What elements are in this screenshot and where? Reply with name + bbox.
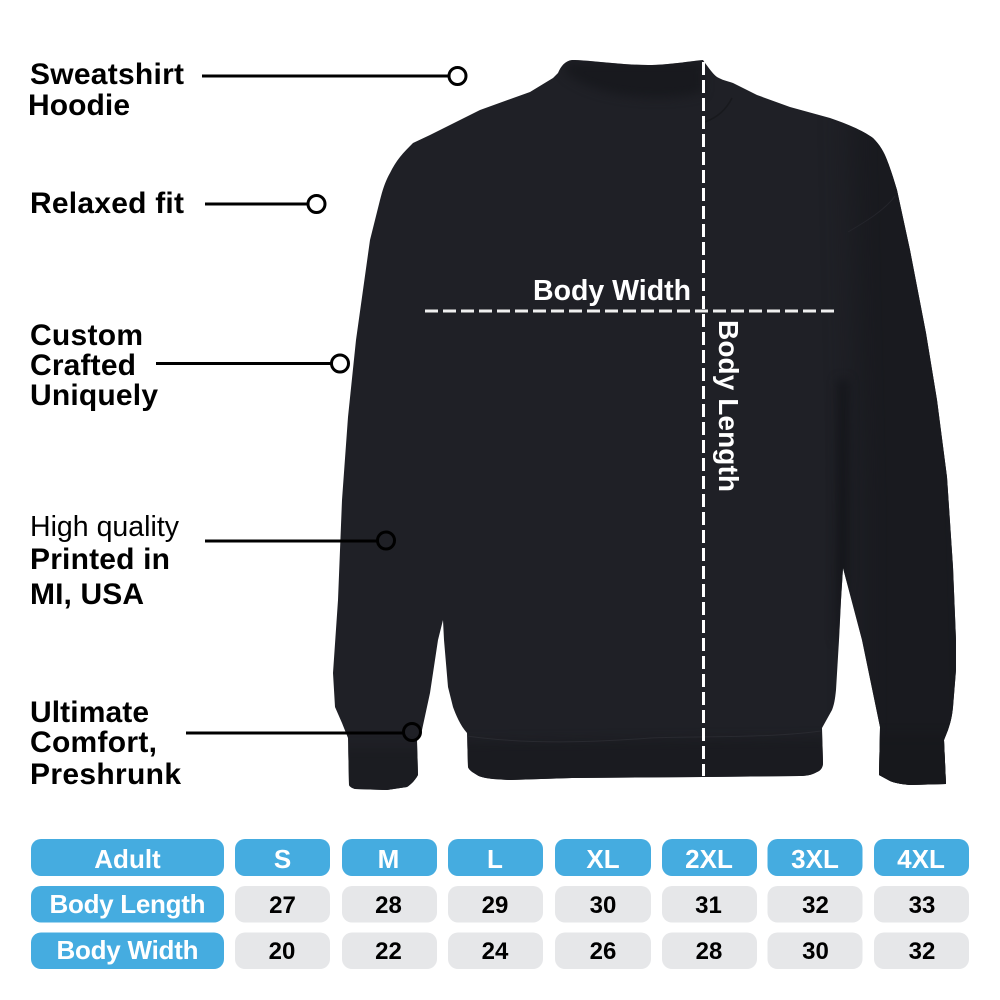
size table bbox=[31, 839, 969, 969]
body length row: 27 bbox=[269, 892, 296, 919]
neck opening shadow bbox=[560, 60, 707, 88]
body width row: 32 bbox=[909, 938, 935, 965]
callout: sweatshirt hoodie: Sweatshirt bbox=[30, 58, 184, 91]
callout: high quality printed in MI, USA: MI, USA bbox=[30, 578, 144, 611]
armpit shadow bbox=[839, 419, 850, 638]
body length row: 32 bbox=[802, 892, 829, 919]
body length row: Body Length bbox=[50, 889, 206, 919]
callout: custom crafted uniquely: Crafted bbox=[30, 349, 136, 382]
body length row bbox=[31, 886, 969, 922]
body width dashed line bbox=[425, 310, 836, 312]
header row: 4XL bbox=[897, 844, 945, 874]
body length dashed line bbox=[702, 62, 705, 776]
header row: S bbox=[274, 844, 291, 874]
collar seam bbox=[705, 98, 732, 122]
body length label: Body Length bbox=[713, 320, 744, 492]
body length row: 30 bbox=[590, 892, 616, 919]
body length row: 33 bbox=[909, 892, 935, 919]
header row: L bbox=[487, 844, 503, 874]
callout: relaxed fit bbox=[30, 187, 325, 220]
body width row: 24 bbox=[482, 938, 509, 965]
header row: XL bbox=[586, 844, 620, 874]
body width row: 22 bbox=[375, 938, 402, 965]
body width row: Body Width bbox=[56, 935, 198, 965]
callout: custom crafted uniquely: Uniquely bbox=[30, 379, 158, 412]
right sleeve shading bbox=[838, 120, 956, 785]
callout: high quality printed in MI, USA bbox=[30, 511, 394, 611]
header row bbox=[31, 839, 969, 876]
callout: sweatshirt hoodie bbox=[28, 58, 466, 122]
callout: ultimate comfort, preshrunk bbox=[30, 696, 420, 791]
body length row: 29 bbox=[482, 892, 508, 919]
body width row: 28 bbox=[696, 938, 722, 965]
body length row: 28 bbox=[375, 892, 402, 919]
hem and cuff shading bbox=[467, 734, 823, 780]
callout: ultimate comfort, preshrunk: Comfort, bbox=[30, 726, 157, 759]
header row: M bbox=[378, 844, 399, 874]
body width row: 20 bbox=[269, 938, 295, 965]
right cuff shading bbox=[879, 732, 948, 785]
callout: relaxed fit: Relaxed fit bbox=[30, 187, 184, 220]
sweatshirt illustration bbox=[320, 50, 980, 800]
callout: high quality printed in MI, USA: Printed in bbox=[30, 543, 170, 576]
body width row: 26 bbox=[590, 938, 616, 965]
callout: custom crafted uniquely: Custom bbox=[30, 319, 143, 352]
body width row: 30 bbox=[802, 938, 829, 965]
callout: sweatshirt hoodie: Hoodie bbox=[28, 89, 130, 122]
body length row: 31 bbox=[695, 892, 722, 919]
header row: 2XL bbox=[685, 844, 733, 874]
header row: 3XL bbox=[791, 844, 839, 874]
body width label: Body Width bbox=[533, 275, 691, 307]
body width row bbox=[31, 932, 969, 969]
callout: ultimate comfort, preshrunk: Ultimate bbox=[30, 696, 149, 729]
hem seam bbox=[467, 731, 821, 742]
callout: high quality printed in MI, USA: High quality bbox=[30, 511, 180, 543]
header row: Adult bbox=[94, 844, 161, 874]
callout: custom crafted uniquely bbox=[30, 319, 348, 412]
callout: ultimate comfort, preshrunk: Preshrunk bbox=[30, 758, 181, 791]
sleeve seam bbox=[848, 196, 895, 232]
